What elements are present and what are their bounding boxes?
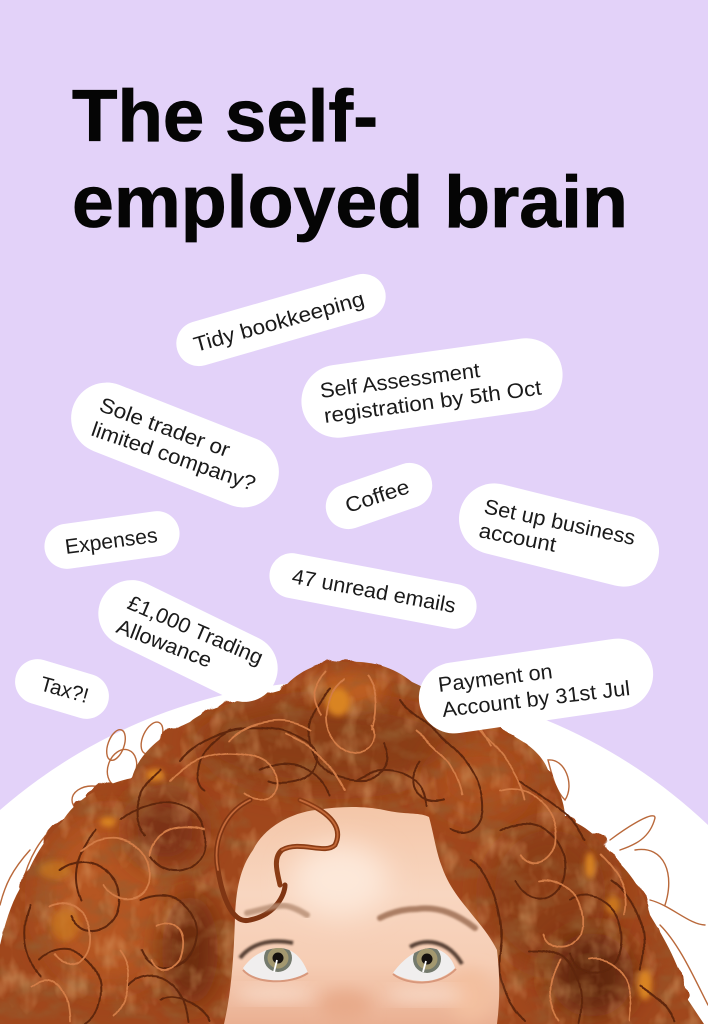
face — [224, 807, 499, 1024]
pill: Payment on Account by 31st Jul — [414, 634, 658, 738]
pill: Sole trader or limited company: Sole trader or — [96, 394, 233, 462]
white circle behind head — [0, 680, 708, 1024]
pill: Expenses — [42, 508, 182, 572]
title: employed brain — [72, 162, 628, 243]
face shading — [235, 844, 492, 1022]
eyebrows — [247, 906, 475, 928]
illustration: woman with curly red hair looking up — [0, 655, 708, 1024]
hair mass — [0, 662, 704, 1024]
hair: light curl strands — [30, 672, 631, 1020]
pill: Coffee: Coffee — [342, 475, 412, 518]
pill: Sole trader or limited company: limited company? — [88, 418, 258, 496]
title — [72, 76, 628, 243]
hair: orange highlights — [39, 688, 652, 1000]
hair: flyaway curls on the white circle — [0, 710, 708, 1005]
title: The self- — [72, 76, 378, 157]
pill: 47 unread emails: 47 unread emails — [290, 565, 458, 618]
pill: Tax?!: Tax?! — [38, 673, 91, 708]
pill: Payment on Account by 31st Jul: Account by 31st Jul — [441, 677, 631, 722]
pill: Set up business account: Set up business — [482, 495, 637, 550]
pill: Expenses: Expenses — [64, 524, 159, 559]
pill: Tax?! — [10, 654, 114, 724]
left eye — [240, 941, 308, 981]
forelock curl over forehead — [217, 800, 338, 921]
pill: Set up business account: account — [477, 519, 558, 557]
pill: Set up business account — [451, 476, 667, 594]
right eye — [393, 942, 462, 982]
pill: Self Assessment registration: registration by 5th Oct — [323, 377, 543, 428]
pill: Tidy bookkeeping — [171, 269, 391, 371]
pill: £1,000 Trading Allowance: £1,000 Trading — [124, 591, 266, 670]
pill: Tidy bookkeeping: Tidy bookkeeping — [191, 288, 367, 357]
pill: Payment on Account by 31st Jul: Payment on — [437, 660, 554, 697]
pill: 47 unread emails — [266, 549, 480, 633]
hair: tonal shading — [40, 672, 634, 1017]
pill: Self Assessment registration: Self Assessment — [319, 359, 481, 403]
pill: £1,000 Trading Allowance: Allowance — [113, 615, 215, 673]
pill: Coffee — [320, 457, 438, 535]
pill: Self Assessment registration — [297, 334, 567, 442]
hair: strand texture — [0, 655, 708, 1024]
pill: Sole trader or limited company — [61, 372, 289, 518]
pill: £1,000 Trading Allowance — [87, 569, 289, 713]
hair: dark curl strands — [25, 690, 675, 1022]
